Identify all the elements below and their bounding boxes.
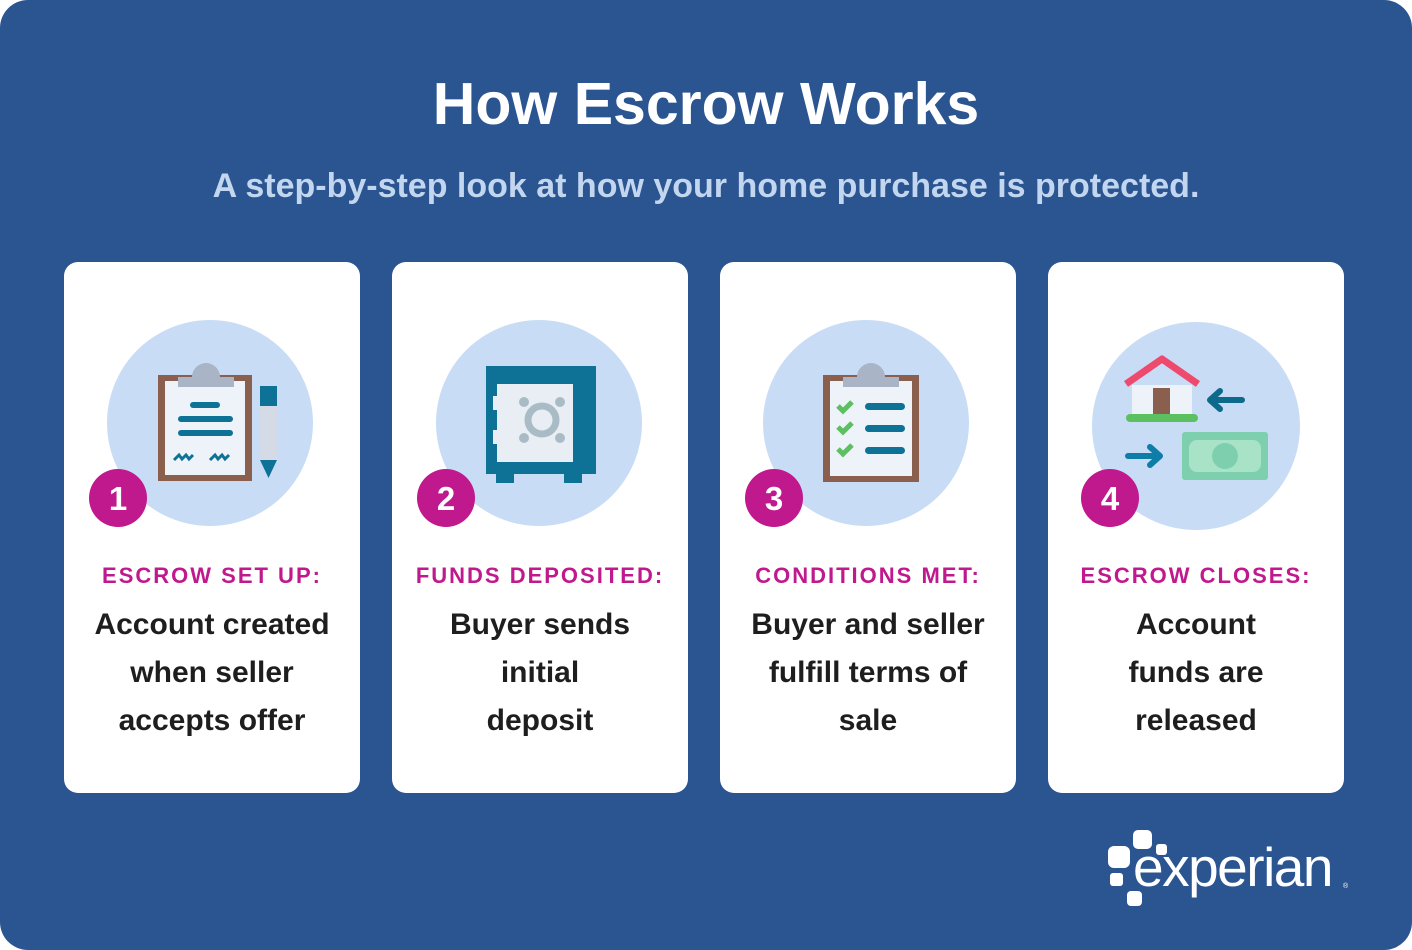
text: Account [1136, 608, 1256, 641]
text [94, 608, 330, 737]
text: released [1135, 704, 1257, 737]
text [751, 608, 985, 737]
logo: experian [1108, 830, 1349, 906]
label: FUNDS DEPOSITED: [416, 563, 664, 588]
text: funds are [1128, 656, 1264, 689]
text: deposit [487, 704, 593, 737]
text [1128, 608, 1264, 737]
text: accepts offer [119, 704, 305, 737]
logo: experian: experian [1133, 836, 1332, 898]
badge: 1 [89, 469, 147, 527]
text: Buyer and seller [751, 608, 985, 641]
icon: house and money exchange [1081, 322, 1300, 530]
text: initial [501, 656, 579, 689]
text: Account created [94, 608, 330, 641]
text: Buyer sends [450, 608, 630, 641]
label: ESCROW SET UP: [102, 563, 322, 588]
title: How Escrow Works [433, 71, 979, 137]
logo: experian: ® [1343, 882, 1349, 890]
badge: 3: 3 [765, 480, 783, 517]
badge: 1: 1 [109, 480, 127, 517]
panel: step 3 [720, 262, 1016, 793]
panel: step 1 [64, 262, 360, 793]
label: ESCROW CLOSES: [1081, 563, 1311, 588]
badge: 4: 4 [1101, 480, 1120, 517]
panel: step 4 [1048, 262, 1344, 793]
text: when seller [130, 656, 294, 689]
badge: 3 [745, 469, 803, 527]
icon: checklist [745, 320, 969, 527]
badge: 2 [417, 469, 475, 527]
text [450, 608, 630, 737]
text: fulfill terms of [769, 656, 967, 689]
label: CONDITIONS MET: [755, 563, 981, 588]
text: sale [839, 704, 897, 737]
icon: clipboard with pencil [89, 320, 313, 527]
subtitle: A step-by-step look at how your home purchase is protected. [213, 167, 1199, 205]
badge: 2: 2 [437, 480, 455, 517]
badge: 4 [1081, 469, 1139, 527]
panel: step 2 [392, 262, 688, 793]
icon: safe [417, 320, 642, 527]
